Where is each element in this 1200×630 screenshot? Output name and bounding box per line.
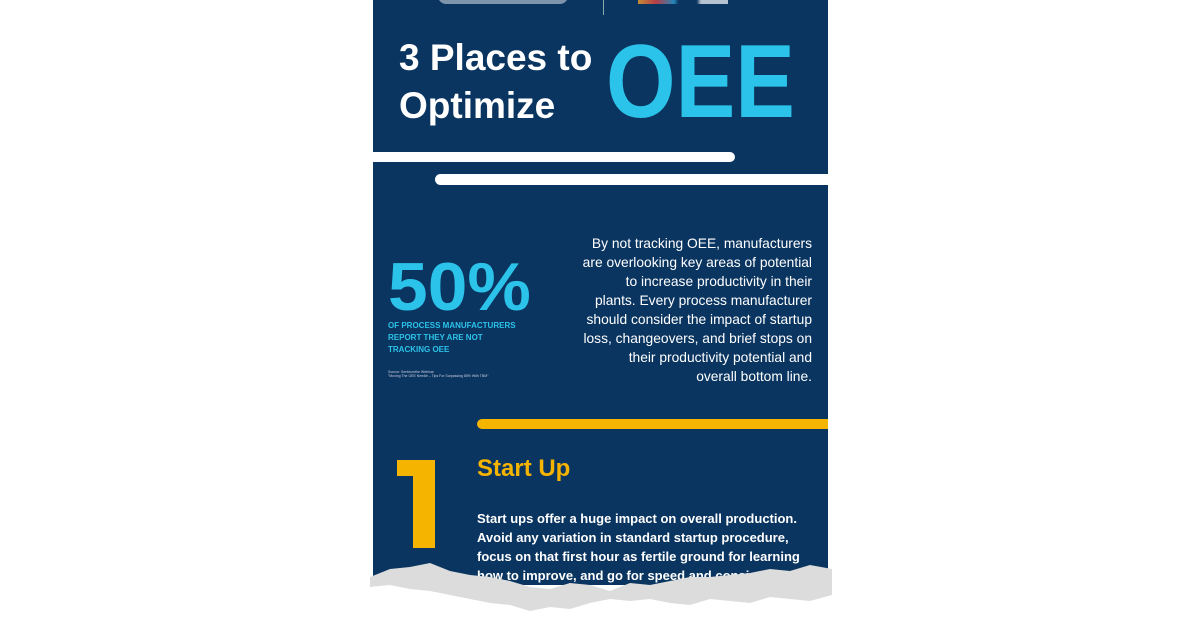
section text: Avoid any variation in standard startup procedure, (477, 530, 789, 545)
intro paragraph: are overlooking key areas of potential (583, 255, 812, 270)
torn paper edge (370, 563, 832, 611)
stat: 50%: OF PROCESS MANUFACTURERS (388, 321, 516, 330)
intro paragraph: to increase productivity in their (626, 274, 812, 289)
section text (477, 511, 800, 583)
number 1 (397, 460, 435, 548)
intro paragraph: should consider the impact of startup (587, 312, 812, 327)
intro paragraph: loss, changeovers, and brief stops on (583, 331, 812, 346)
intro paragraph: plants. Every process manufacturer (595, 293, 812, 308)
panel: infographic (373, 0, 828, 585)
logo left (438, 0, 568, 4)
section text: how to improve, and go for speed and consistency. (477, 568, 793, 583)
stat: 50% (388, 249, 531, 378)
intro paragraph (583, 236, 812, 384)
title: Optimize (399, 85, 555, 126)
intro paragraph: their productivity potential and (629, 350, 812, 365)
heading: Start Up: Start Up (477, 455, 570, 482)
intro paragraph: By not tracking OEE, manufacturers (592, 236, 812, 251)
logo right (638, 0, 728, 4)
yellow bar (477, 419, 837, 429)
logos (439, 0, 728, 15)
intro paragraph: overall bottom line. (696, 369, 812, 384)
stat: 50%: REPORT THEY ARE NOT (388, 333, 483, 342)
section text: focus on that first hour as fertile ground for learning (477, 549, 800, 564)
white bars (373, 152, 735, 162)
stat: 50%: 50% (388, 249, 531, 325)
stat: 50%: TRACKING OEE (388, 345, 449, 354)
stat: 50%: Source: Sentriumthe Webinar (388, 370, 434, 374)
title: OEE: OEE (606, 24, 795, 140)
section text: Start ups offer a huge impact on overall production. (477, 511, 797, 526)
title: 3 Places to (399, 37, 592, 78)
stat: 50%: "Moving The OEE Needle – Tips For Surpassing 85% With TBM" (388, 374, 488, 378)
title (399, 37, 592, 126)
